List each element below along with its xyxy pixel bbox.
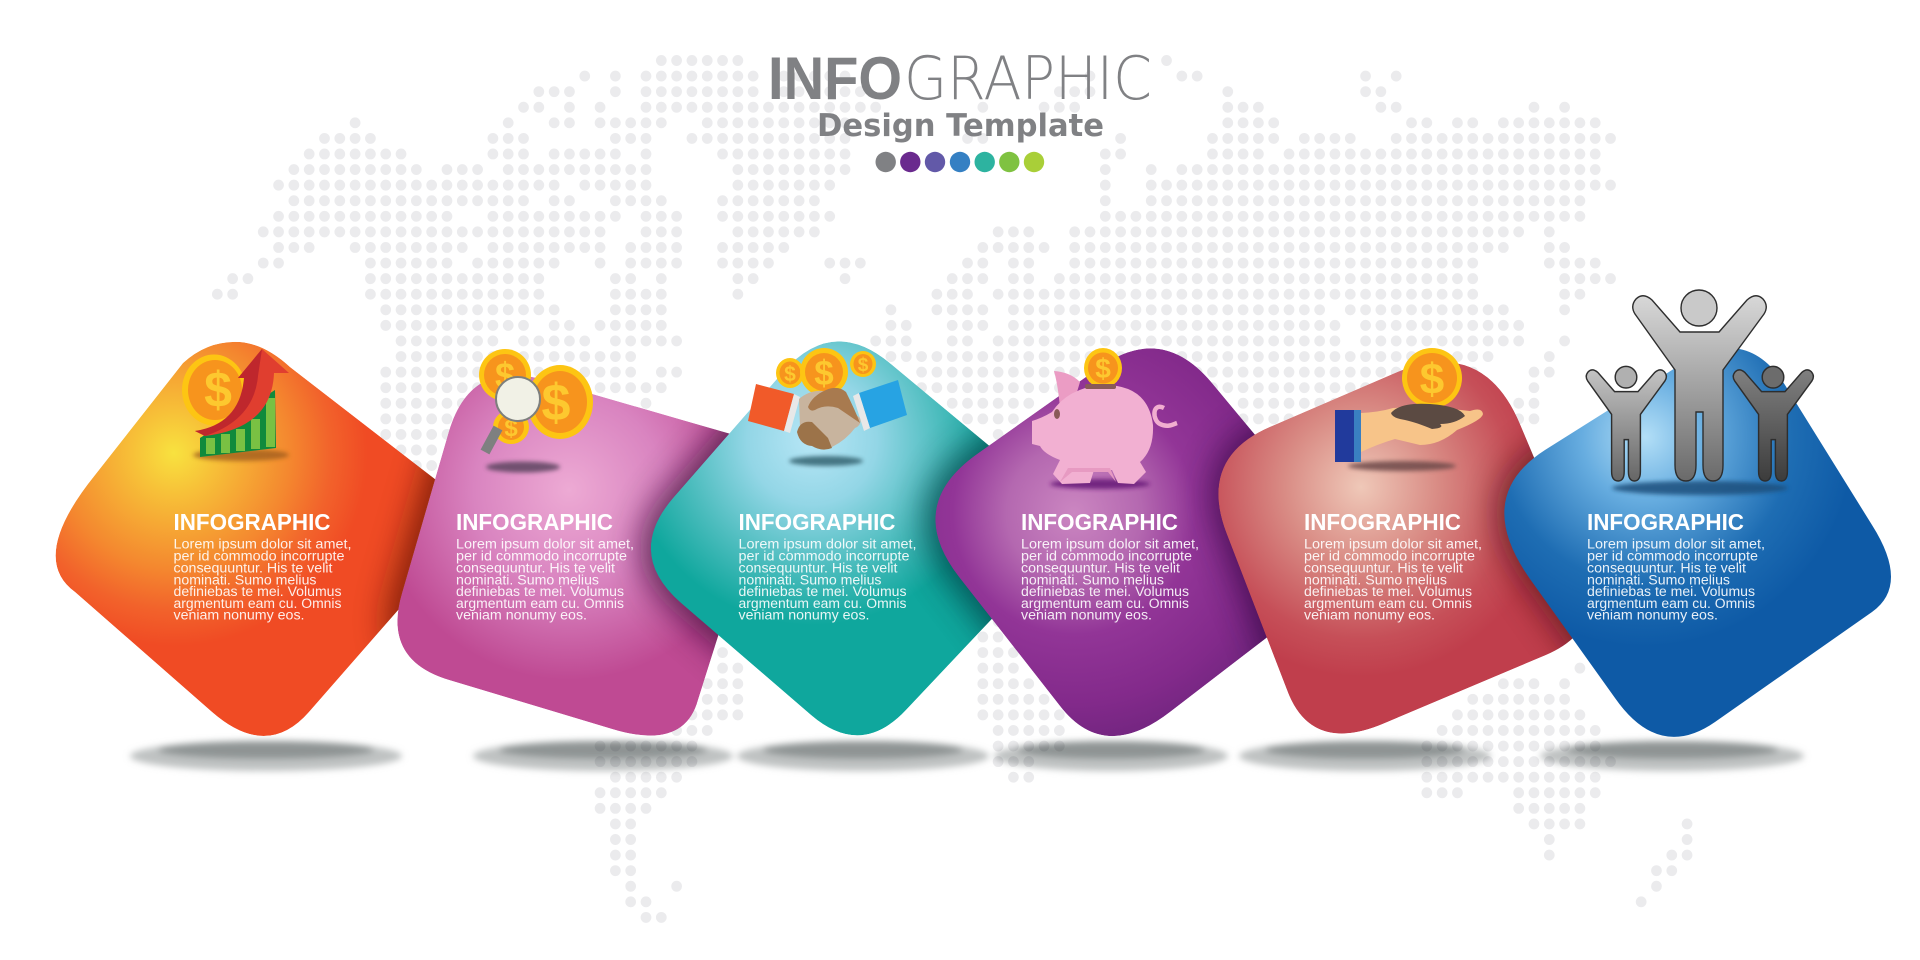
icon: family of three [1586, 290, 1813, 495]
body text: per id commodo incorrupte [1021, 548, 1192, 564]
body text: nominati. Sumo melius [1587, 572, 1730, 587]
body text [1304, 537, 1482, 623]
heading: INFOGRAPHIC [1304, 509, 1461, 535]
heading: INFOGRAPHIC [1587, 509, 1744, 535]
icon: rising chart with coin: $ [204, 362, 232, 418]
body text [1587, 537, 1765, 623]
body text [456, 537, 634, 623]
body text: veniam nonumy eos. [1587, 608, 1718, 623]
palette dots [876, 152, 1044, 172]
body text: consequuntur. His te velit [174, 560, 333, 576]
icon: coins and magnifier: $ [542, 374, 571, 432]
icon: coins and magnifier [479, 349, 593, 472]
body text [174, 537, 352, 623]
body text: veniam nonumy eos. [1304, 608, 1435, 623]
background: dotted world map [217, 60, 1687, 917]
body text: argmentum eam cu. Omnis [174, 596, 342, 611]
body text: definiebas te mei. Volumus [456, 584, 624, 599]
body text: Lorem ipsum dolor sit amet, [738, 537, 916, 552]
body text: nominati. Sumo melius [738, 572, 882, 587]
body text [1021, 537, 1199, 623]
title: INFOGRAPHIC: INFO [768, 45, 902, 112]
icon: hand holding coin [1335, 348, 1483, 471]
icon: handshake with coins: $ [814, 354, 834, 393]
body text: Lorem ipsum dolor sit amet, [456, 537, 634, 552]
body text: argmentum eam cu. Omnis [1587, 596, 1755, 611]
icon: piggy bank with coin [1032, 348, 1177, 489]
body text: argmentum eam cu. Omnis [456, 596, 624, 611]
body text: definiebas te mei. Volumus [174, 584, 342, 599]
body text: Lorem ipsum dolor sit amet, [1304, 537, 1482, 552]
heading: INFOGRAPHIC [456, 509, 613, 535]
body text: nominati. Sumo melius [456, 572, 599, 587]
body text: per id commodo incorrupte [174, 548, 344, 564]
panel: card 3 teal [650, 342, 992, 736]
body text: definiebas te mei. Volumus [1021, 584, 1189, 599]
body text: veniam nonumy eos. [738, 608, 870, 623]
icon: piggy bank with coin: $ [1095, 353, 1111, 384]
panel: card 5 red [1218, 348, 1572, 734]
heading: INFOGRAPHIC [174, 509, 330, 535]
body text: Lorem ipsum dolor sit amet, [1021, 537, 1199, 552]
ground shadows under cards [130, 741, 1804, 771]
icon: coins and magnifier: $ [504, 415, 518, 442]
icon: hand holding coin: $ [1420, 355, 1444, 404]
icon: rising chart with coin [182, 349, 289, 461]
body text: per id commodo incorrupte [456, 548, 627, 564]
icon: handshake with coins: $ [784, 363, 796, 386]
panel: card 1 orange [56, 342, 435, 736]
body text: argmentum eam cu. Omnis [1304, 596, 1472, 611]
subtitle: Design Template: Design Template [817, 108, 1104, 144]
body text: veniam nonumy eos. [456, 608, 587, 623]
body text: per id commodo incorrupte [1304, 548, 1475, 564]
body text: nominati. Sumo melius [1021, 572, 1164, 587]
panel: card 6 blue [1504, 290, 1891, 737]
body text: consequuntur. His te velit [1021, 560, 1180, 576]
icon: coins and magnifier: $ [495, 355, 515, 396]
body text: per id commodo incorrupte [738, 548, 910, 564]
panel: card 2 pink [398, 349, 730, 736]
body text: veniam nonumy eos. [174, 608, 304, 623]
body text: nominati. Sumo melius [1304, 572, 1447, 587]
panel: card 4 purple [936, 348, 1267, 736]
body text: per id commodo incorrupte [1587, 548, 1758, 564]
body text [738, 537, 916, 623]
body text: definiebas te mei. Volumus [738, 584, 907, 599]
body text: consequuntur. His te velit [456, 560, 615, 576]
body text: nominati. Sumo melius [174, 572, 317, 587]
body text: consequuntur. His te velit [738, 560, 898, 576]
icon: handshake with coins: $ [858, 355, 869, 376]
icon: handshake with coins [748, 348, 907, 466]
body text: argmentum eam cu. Omnis [738, 596, 907, 611]
title: INFOGRAPHIC: GRAPHIC [904, 44, 1152, 114]
body text: definiebas te mei. Volumus [1304, 584, 1472, 599]
body text: consequuntur. His te velit [1587, 560, 1746, 576]
body text: definiebas te mei. Volumus [1587, 584, 1755, 599]
heading: INFOGRAPHIC [738, 509, 896, 535]
body text: veniam nonumy eos. [1021, 608, 1152, 623]
title: INFOGRAPHIC [768, 44, 1152, 114]
body text: Lorem ipsum dolor sit amet, [1587, 537, 1765, 552]
body text: argmentum eam cu. Omnis [1021, 596, 1189, 611]
body text: consequuntur. His te velit [1304, 560, 1463, 576]
body text: Lorem ipsum dolor sit amet, [174, 537, 352, 552]
heading: INFOGRAPHIC [1021, 509, 1178, 535]
